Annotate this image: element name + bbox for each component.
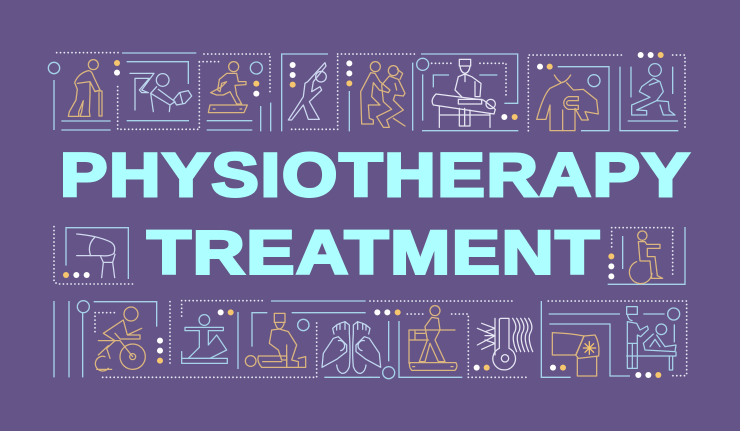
- icon: side stretch exercise: [288, 63, 326, 120]
- icon: leg press machine: [130, 73, 192, 112]
- icon: elderly person with cane: [68, 60, 102, 116]
- icon: seated yoga stretch: [182, 315, 227, 363]
- icon: shoulder pain back view: [537, 75, 598, 131]
- icon: two people massage chair: [361, 62, 405, 127]
- bottom icon row, right half: [370, 301, 687, 379]
- icon: therapist with patient on bench: [627, 307, 676, 370]
- middle left panel: knee: [54, 227, 133, 284]
- icon: rehabilitation walker: [409, 306, 457, 370]
- icon: doctor treating patient on table: [432, 59, 495, 127]
- icon: cold therapy thermometer: [477, 318, 533, 370]
- top icon row, right half: [413, 52, 685, 131]
- icon: knee with cold pack: [552, 333, 599, 376]
- bottom icon row, left half: [54, 301, 370, 377]
- icon: reflexology feet: [322, 322, 381, 373]
- icon: person in wheelchair: [629, 231, 663, 284]
- icon: knee joint: [77, 234, 115, 278]
- icon: exercise bike rider: [95, 307, 145, 371]
- title: TREATMENT: [147, 218, 601, 286]
- title: [60, 141, 691, 286]
- icon: lunge exercise: [632, 64, 675, 115]
- title: PHYSIOTHERAPY: [60, 141, 691, 209]
- top icon row, left half: [48, 53, 417, 131]
- middle right panel: wheelchair: [608, 228, 685, 284]
- icon: doctor giving CPR: [245, 313, 306, 367]
- icon: person running on treadmill: [208, 62, 247, 113]
